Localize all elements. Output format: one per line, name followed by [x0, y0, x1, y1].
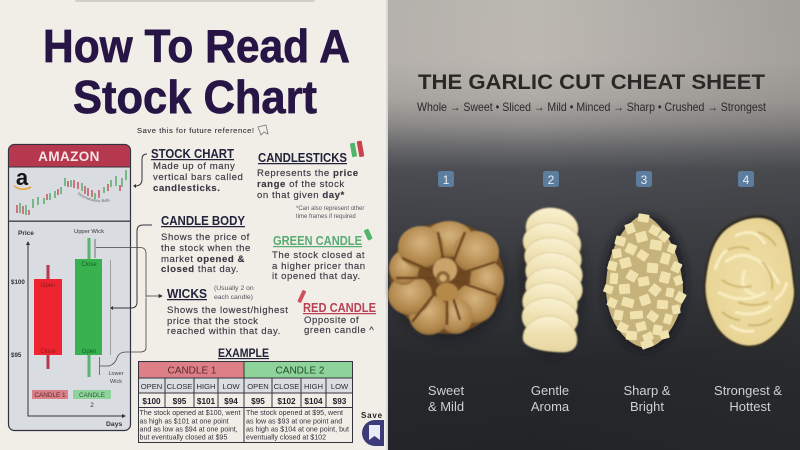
icon: save bookmark: Save — [361, 411, 383, 420]
label: gentle aroma: Gentle — [531, 383, 569, 398]
example table: HIGH — [304, 382, 323, 391]
text block: stock chart: STOCK CHART — [151, 147, 234, 161]
text block: candle body: Shows the price of — [161, 232, 250, 243]
label: sharp and bright: Bright — [630, 399, 664, 414]
axis: price: Days — [106, 421, 122, 428]
text block: stock chart: candlesticks. — [153, 183, 220, 194]
label: gentle aroma — [531, 383, 570, 414]
candle 2: green: Open — [82, 349, 96, 355]
text block: green candle: The stock closed at — [272, 250, 365, 261]
illustration: sliced garlic — [518, 205, 586, 357]
candle 1: red: Close — [40, 349, 56, 355]
label: lower wick: Lower — [109, 371, 124, 377]
icon: candlesticks — [350, 141, 364, 157]
example table: CANDLE 1 — [168, 366, 217, 376]
text block: candlesticks: CANDLESTICKS — [258, 151, 347, 165]
badge 4 — [738, 171, 754, 187]
legend: candle labels — [32, 390, 111, 409]
badge 3 — [636, 171, 652, 187]
panel: stock chart guide — [0, 0, 388, 450]
text block: stock chart: vertical bars called — [153, 172, 243, 183]
title: How To Read A Stock Chart — [43, 20, 350, 123]
label: sweet and mild: Sweet — [428, 383, 464, 398]
panel: garlic cut cheat sheet — [388, 0, 800, 450]
panel: Amazon chart card — [8, 144, 132, 432]
example table: The stock opened at $100, went — [140, 409, 240, 417]
example heading: EXAMPLE — [218, 348, 269, 360]
badge 1: 1 — [443, 173, 450, 187]
example table: as high as $104 at one point, but — [246, 426, 349, 434]
axis: price: Price — [18, 230, 34, 237]
example table: $104 — [304, 397, 323, 406]
text block: candle body: the stock when the — [161, 243, 251, 254]
label: lower wick — [109, 371, 124, 385]
candle 1: red: Open — [41, 283, 55, 289]
candle 2: green — [75, 238, 102, 377]
example table: OPEN — [141, 382, 162, 391]
text block: candlesticks — [257, 151, 364, 220]
axis: price: $95 — [11, 352, 22, 359]
label: upper wick: Upper Wick — [74, 229, 104, 235]
text block: red candle: green candle ^ — [304, 325, 374, 336]
example table: HIGH — [197, 382, 215, 391]
label: strongest and hottest: Strongest & — [714, 383, 782, 398]
example table: CANDLE 2 — [276, 366, 325, 376]
example table: $94 — [224, 397, 238, 406]
example table: $100 — [142, 397, 161, 406]
example table: LOW — [222, 382, 240, 391]
label: gentle aroma: Aroma — [531, 399, 570, 414]
example table: CLOSE — [274, 382, 299, 391]
badge 4: 4 — [743, 173, 750, 187]
text block: red candle — [297, 290, 376, 336]
example table: as high as $101 at one point — [140, 418, 229, 426]
example table: $95 — [251, 397, 265, 406]
mini candlestick chart — [16, 170, 127, 215]
example table: as low as $93 at one point and — [246, 418, 342, 426]
text block: green candle: a higher pricer than — [272, 261, 366, 272]
badge 2 — [543, 171, 559, 187]
text block: candle body — [161, 214, 251, 275]
example table: but eventually closed at $95 — [140, 434, 227, 442]
connector arrows — [95, 154, 162, 375]
text block: wicks: price that the stock — [167, 316, 259, 327]
text block: candlesticks: Represents the price — [257, 168, 359, 179]
text block: wicks: reached within that day. — [167, 326, 281, 337]
label: sharp and bright — [624, 383, 671, 414]
text block: stock chart — [151, 147, 243, 194]
text block: green candle: GREEN CANDLE — [273, 234, 362, 248]
axis: price: $100 — [11, 279, 25, 286]
illustration: whole garlic bulb — [388, 221, 507, 340]
label: strongest and hottest — [714, 383, 782, 414]
candle 1: red — [34, 265, 62, 369]
mini candlestick chart: Stromwhalesy Bulls — [78, 192, 110, 203]
icon: Amazon logo: a — [16, 165, 29, 190]
legend: candle labels: 2 — [90, 402, 94, 409]
text block: candle body: market opened & — [161, 254, 245, 265]
text block: wicks — [167, 285, 288, 337]
example table: $93 — [333, 397, 347, 406]
text block: wicks: WICKS — [167, 287, 207, 301]
legend: candle labels: CANDLE 1 — [34, 392, 66, 399]
label: sweet and mild: & Mild — [428, 399, 464, 414]
text block: red candle: Opposite of — [304, 315, 359, 326]
text block: stock chart: Made up of many — [153, 161, 235, 172]
card heading: Amazon: AMAZON — [38, 149, 100, 164]
example table: The stock opened at $95, went — [246, 409, 343, 417]
label: lower wick: Wick — [110, 379, 122, 385]
example table — [138, 361, 353, 443]
title: How To Read A Stock Chart: Stock Chart — [73, 71, 317, 123]
axis: price — [11, 230, 126, 428]
illustration: crushed garlic paste — [704, 215, 796, 348]
title: How To Read A Stock Chart: How To Read A — [43, 20, 350, 72]
title: garlic cut cheat sheet: THE GARLIC CUT CHEAT SHEET — [418, 71, 765, 94]
example table: $101 — [197, 397, 216, 406]
badge 3: 3 — [641, 173, 648, 187]
example table: OPEN — [247, 382, 269, 391]
example table: LOW — [331, 382, 349, 391]
example table: $102 — [277, 397, 296, 406]
text block: candlesticks: *Can also represent other — [296, 206, 364, 212]
text block: wicks: Shows the lowest/highest — [167, 305, 288, 316]
text block: wicks: (Usually 2 on — [214, 285, 254, 292]
text block: candle body: closed that day. — [161, 264, 239, 275]
candle 2: green: Close — [81, 262, 97, 268]
text block: candlesticks: on that given day* — [257, 190, 345, 201]
text block: red candle: RED CANDLE — [303, 301, 376, 315]
legend: candle labels: CANDLE — [79, 392, 105, 399]
example table: CLOSE — [167, 382, 192, 391]
text block: wicks: each candle) — [214, 294, 253, 301]
text block: candle body: CANDLE BODY — [161, 214, 246, 228]
illustration: minced garlic — [603, 213, 687, 351]
text block: green candle — [272, 229, 373, 282]
text block: candlesticks: range of the stock — [257, 179, 345, 190]
badge 2: 2 — [548, 173, 555, 187]
label: sharp and bright: Sharp & — [624, 383, 671, 398]
example table: and as low as $94 at one point, — [140, 426, 238, 434]
text block: candlesticks: time frames if required — [296, 214, 356, 220]
example table: $95 — [173, 397, 187, 406]
example table: eventually closed at $102 — [246, 434, 326, 442]
label: sweet and mild — [428, 383, 464, 414]
badge 1 — [438, 171, 454, 187]
subtitle: save note: Save this for future reference! — [137, 126, 254, 135]
icon: save bookmark — [361, 411, 384, 446]
text block: green candle: it opened that day. — [272, 271, 361, 282]
label: strongest and hottest: Hottest — [729, 399, 771, 414]
